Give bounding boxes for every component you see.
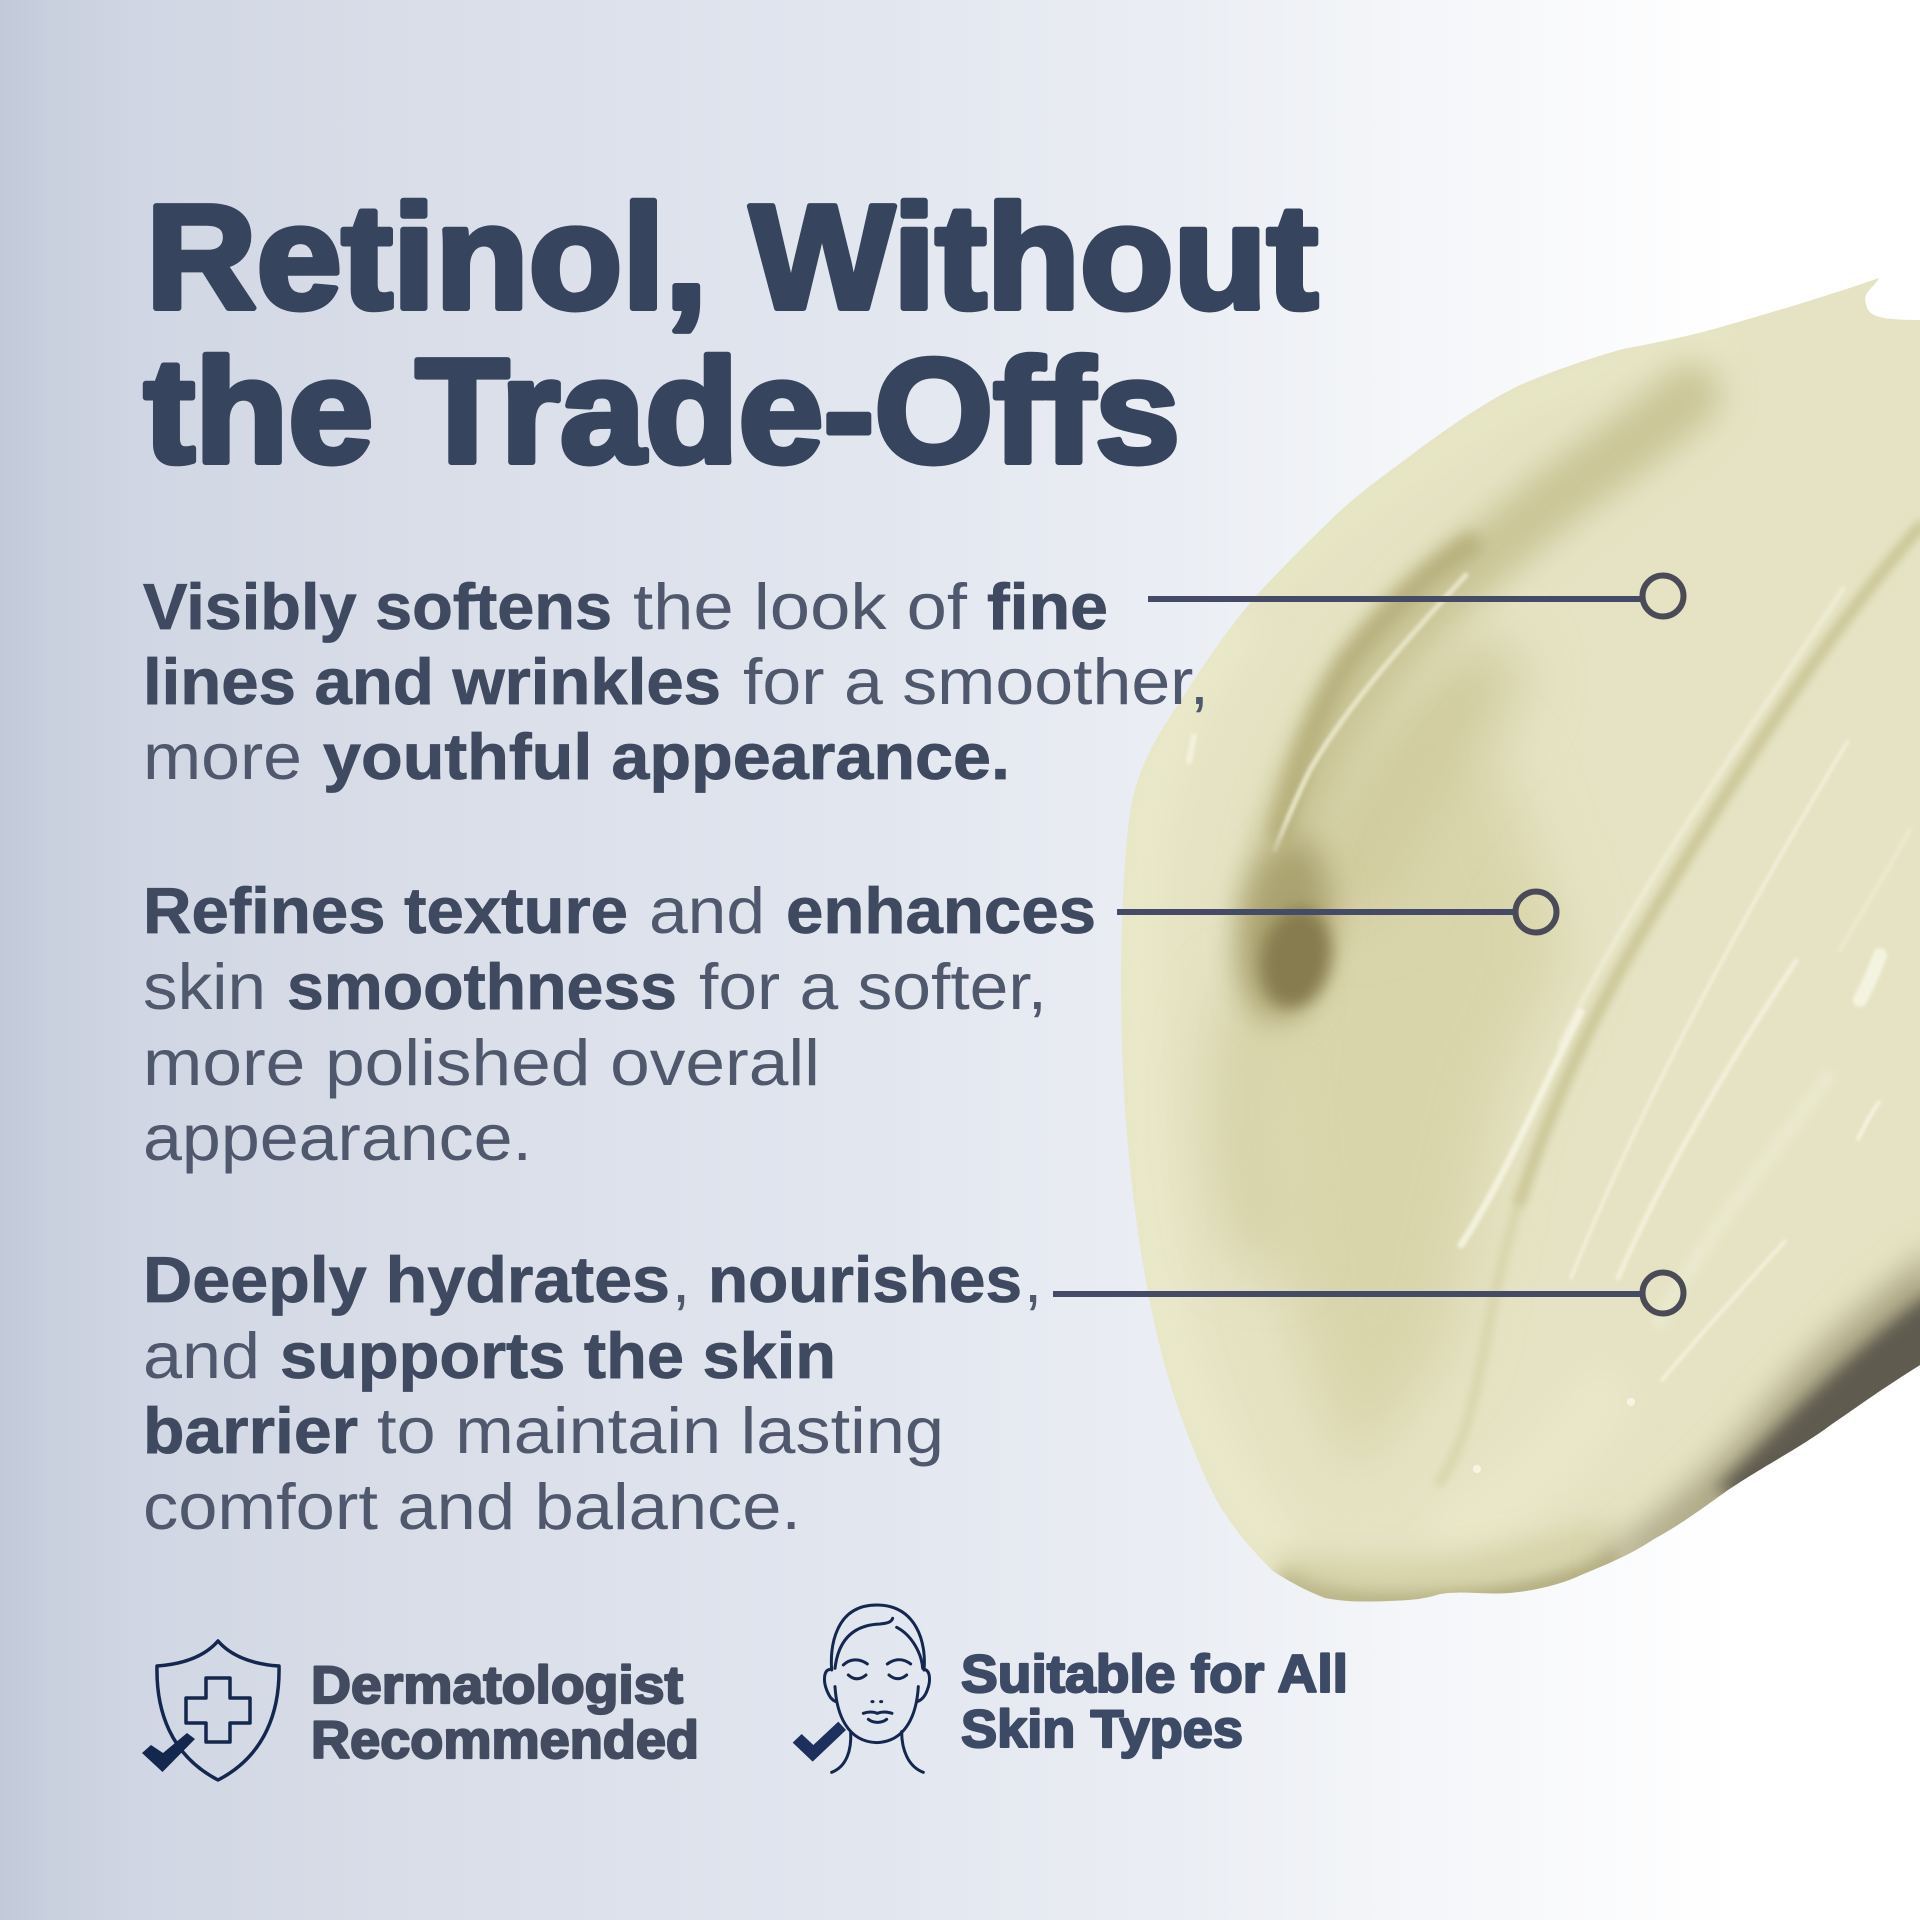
text block: texture benefit: and — [649, 874, 765, 947]
text block: hydration benefit: nourishes — [708, 1243, 1022, 1316]
text block: fine lines benefit: youthful appearance. — [323, 720, 1010, 793]
text block: hydration benefit — [143, 1243, 1042, 1543]
text block: hydration benefit: comfort and balance. — [143, 1470, 801, 1543]
text block: fine lines benefit — [143, 570, 1209, 793]
text block: texture benefit: smoothness — [287, 950, 677, 1023]
text block: texture benefit: enhances — [786, 874, 1096, 947]
text block: hydration benefit: supports the skin — [280, 1319, 836, 1392]
text block: hydration benefit: Deeply hydrates — [143, 1243, 670, 1316]
text block: hydration benefit: , — [1024, 1243, 1042, 1316]
callout line 2 — [1117, 892, 1556, 932]
text block: fine lines benefit: the look of — [633, 570, 968, 643]
title: the Trade-Offs — [144, 329, 1180, 494]
text block: fine lines benefit: for a smoother, — [743, 645, 1209, 718]
callout line 1 — [1148, 576, 1684, 616]
badge label: suitable for all skin types — [961, 1645, 1348, 1759]
text block: fine lines benefit: lines and wrinkles — [143, 645, 721, 718]
glossy highlights — [1189, 589, 1910, 1473]
cream swatch — [1100, 250, 1920, 1610]
text block: hydration benefit: barrier — [143, 1394, 358, 1467]
badge label: dermatologist recommended — [311, 1656, 699, 1770]
callout line 3 — [1053, 1272, 1684, 1314]
text block: fine lines benefit: fine — [987, 570, 1108, 643]
text block: fine lines benefit: Visibly softens — [143, 570, 612, 643]
icon: shield with cross and check — [142, 1641, 279, 1780]
text block: texture benefit: appearance. — [143, 1101, 532, 1174]
title: Retinol, Without — [146, 175, 1318, 340]
text block: hydration benefit: , — [672, 1243, 690, 1316]
icon: face with check — [793, 1605, 930, 1772]
title — [144, 175, 1318, 494]
text block: texture benefit: for a softer, — [699, 950, 1047, 1023]
text block: texture benefit: Refines texture — [143, 874, 628, 947]
text block: hydration benefit: to maintain lasting — [377, 1394, 944, 1467]
badge label: dermatologist recommended: Recommended — [311, 1711, 699, 1770]
dark dent — [1227, 832, 1343, 1028]
text block: fine lines benefit: more — [143, 720, 302, 793]
text block: hydration benefit: and — [143, 1319, 260, 1392]
text block: texture benefit — [143, 874, 1096, 1174]
badge label: suitable for all skin types: Suitable for All — [961, 1645, 1348, 1704]
text block: texture benefit: skin — [143, 950, 266, 1023]
badge label: dermatologist recommended: Dermatologist — [311, 1656, 683, 1715]
lower-right shadow — [1600, 1245, 1920, 1570]
badge label: suitable for all skin types: Skin Types — [961, 1700, 1243, 1759]
text block: texture benefit: more polished overall — [143, 1026, 820, 1099]
